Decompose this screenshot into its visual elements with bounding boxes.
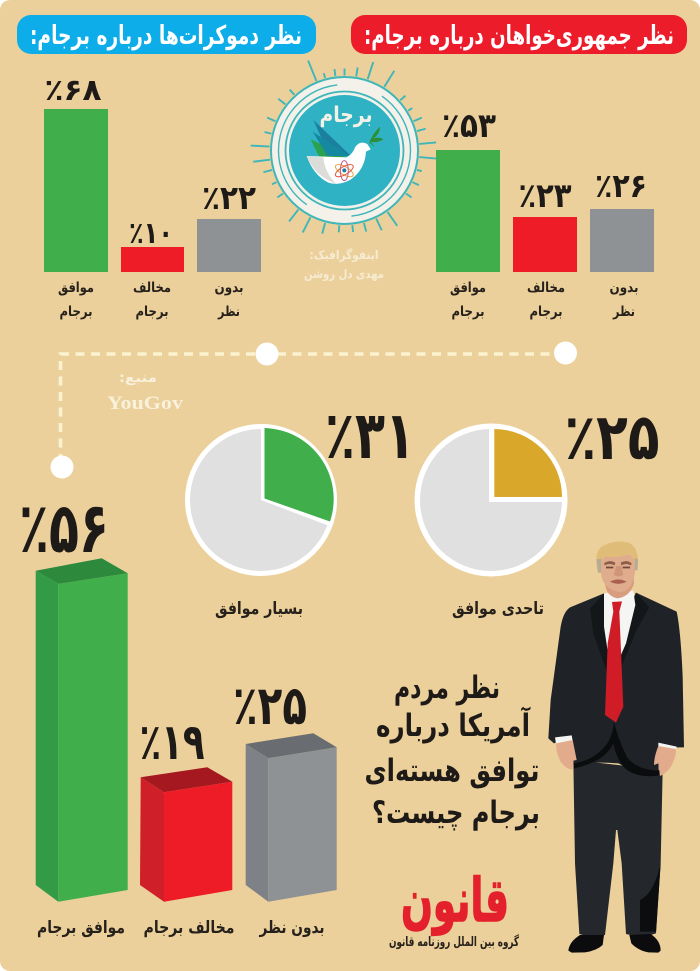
source note: YouGov: [107, 393, 184, 414]
pie chart: somewhat in favour 25: [414, 401, 660, 619]
bar: republicans against 23: [513, 176, 577, 320]
trousers: [573, 760, 663, 936]
label: strongly in favour: بسیار موافق: [215, 599, 303, 619]
value: 31 percent: ٪۳۱: [325, 397, 415, 474]
bar: republicans no opinion 26: [590, 166, 654, 320]
pie chart: strongly in favour 31: [185, 397, 415, 619]
main title question: [364, 670, 540, 831]
3D bar: against 19: مخالف برجام: [144, 918, 234, 938]
bar: democrats against 10: مخالف: [133, 280, 171, 296]
bar: democrats in favour 68: ٪۶۸: [44, 73, 102, 108]
bar: republicans in favour 53: [436, 106, 500, 320]
bar: democrats no opinion 22: ٪۲۲: [202, 178, 256, 217]
bar: republicans against 23: مخالف: [527, 280, 565, 296]
bar: republicans no opinion 26: ٪۲۶: [595, 166, 647, 205]
value: 25 percent: ٪۲۵: [564, 401, 660, 475]
3D bar chart: all Americans: [19, 487, 337, 938]
neck and head: [605, 573, 634, 598]
hands and cuffs: [555, 735, 573, 744]
shoes: [568, 935, 604, 953]
illustration: Donald Trump standing: [548, 541, 684, 953]
shirt: [604, 591, 635, 667]
3D bar: no opinion 25: بدون نظر: [259, 918, 324, 938]
main title question: نظر مردم: [394, 670, 500, 706]
newspaper logo: قانون: [401, 866, 509, 936]
tie: [605, 601, 623, 723]
header pill: democrats: نظر دموکرات‌ها درباره برجام:: [30, 21, 302, 51]
hair: [596, 541, 638, 573]
bar: democrats in favour 68: موافق: [58, 280, 94, 296]
bar: republicans no opinion 26: نظر: [612, 304, 635, 320]
bar: democrats no opinion 22: نظر: [217, 304, 240, 320]
label: somewhat in favour: تاحدی موافق: [452, 599, 544, 619]
3D bar: in favour 56: ٪۵۶: [19, 487, 109, 569]
credit: infographic author: اینفوگرافیک:: [310, 248, 378, 263]
3D bar: in favour 56: موافق برجام: [37, 918, 125, 938]
credit: infographic author: [304, 248, 384, 282]
3D bar: against 19: ٪۱۹: [140, 713, 204, 771]
jacket: [548, 593, 684, 772]
bar: republicans no opinion 26: بدون: [610, 280, 638, 296]
main title question: برجام چیست؟: [372, 795, 540, 831]
3D bar: no opinion 25: [233, 674, 337, 938]
3D bar: in favour 56: [19, 487, 128, 938]
wordmark: برجام: [320, 103, 372, 128]
main title question: آمریکا درباره: [376, 706, 531, 744]
bar: republicans against 23: ٪۲۳: [518, 176, 572, 216]
icon: JCPOA dove badge: [251, 59, 436, 242]
bar: democrats against 10: برجام: [136, 304, 168, 320]
source note: [107, 371, 184, 414]
3D bar: no opinion 25: ٪۲۵: [233, 674, 307, 737]
source note: منبع:: [119, 371, 157, 386]
tagline: گروه بین الملل روزنامه قانون: [389, 934, 519, 950]
header pill: democrats: [17, 15, 316, 54]
bar: republicans in favour 53: ٪۵۳: [442, 106, 496, 146]
bar: democrats in favour 68: [44, 73, 108, 320]
bar: democrats against 10: ٪۱۰: [129, 216, 173, 251]
bar: republicans in favour 53: برجام: [452, 304, 484, 320]
3D bar: against 19: [140, 713, 234, 938]
bar: democrats against 10: [121, 216, 184, 320]
main title question: توافق هسته‌ای: [364, 753, 540, 789]
newspaper logo: [389, 866, 519, 950]
bar: democrats no opinion 22: [197, 178, 261, 320]
bar: democrats in favour 68: برجام: [60, 304, 92, 320]
bar: republicans in favour 53: موافق: [450, 280, 486, 296]
credit: infographic author: مهدی دل روشن: [304, 267, 384, 282]
bar chart: republicans: [436, 106, 654, 320]
bar: republicans against 23: برجام: [530, 304, 562, 320]
dashed connector with dots: [50, 342, 577, 478]
bar chart: democrats: [44, 73, 261, 320]
bar: democrats no opinion 22: بدون: [214, 280, 244, 296]
brows, eyes, nose and mouth: [604, 561, 632, 565]
